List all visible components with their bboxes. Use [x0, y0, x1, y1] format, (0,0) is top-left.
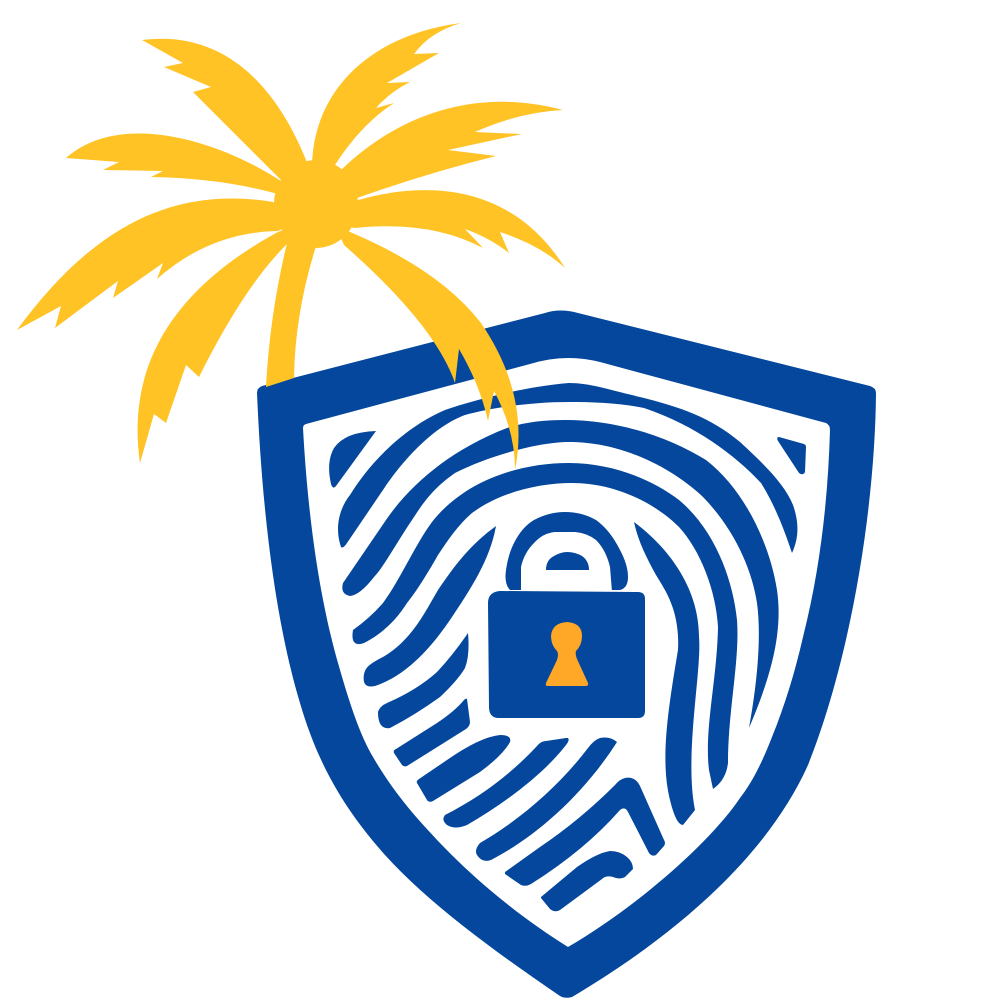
ridge: outer arc — [338, 383, 797, 553]
shield — [257, 310, 876, 998]
ridge: bottom hook — [541, 851, 633, 911]
frond: upper right — [330, 102, 563, 202]
shield outer border — [257, 310, 876, 998]
frond: top left — [142, 39, 320, 200]
ridge: lower hook — [505, 778, 665, 886]
frond: right — [335, 190, 565, 268]
icon: palm tree — [17, 23, 565, 470]
shield inner white field — [303, 358, 830, 947]
ridge: top-left wedge — [329, 431, 376, 488]
frond: lower left — [138, 225, 295, 463]
ridge: lower 5 — [476, 738, 617, 861]
ridge: right of lock — [634, 522, 699, 825]
frond: left — [17, 198, 300, 330]
ridge: second arc — [342, 420, 779, 728]
ridge: left of lock — [364, 526, 496, 686]
ridge: top-right triangle — [777, 437, 806, 474]
padlock window — [546, 552, 589, 570]
ridge: lower left 3 — [417, 735, 510, 802]
padlock shackle opening — [521, 532, 612, 592]
icon: keyhole — [546, 622, 588, 686]
ridge: third arc — [352, 463, 737, 789]
icon: padlock — [488, 512, 645, 718]
palm crown — [274, 160, 358, 248]
frond: top right — [312, 23, 461, 200]
frond: lower right over shield — [335, 225, 519, 470]
ridge: lower left 2 — [394, 699, 470, 766]
ridge: lower left 1 — [378, 633, 469, 728]
padlock shackle — [506, 512, 628, 590]
frond: upper left — [66, 133, 300, 200]
ridge: lower 4 — [443, 738, 569, 828]
padlock body — [488, 591, 645, 718]
palm trunk — [266, 235, 318, 387]
fingerprint ridges — [329, 383, 806, 911]
